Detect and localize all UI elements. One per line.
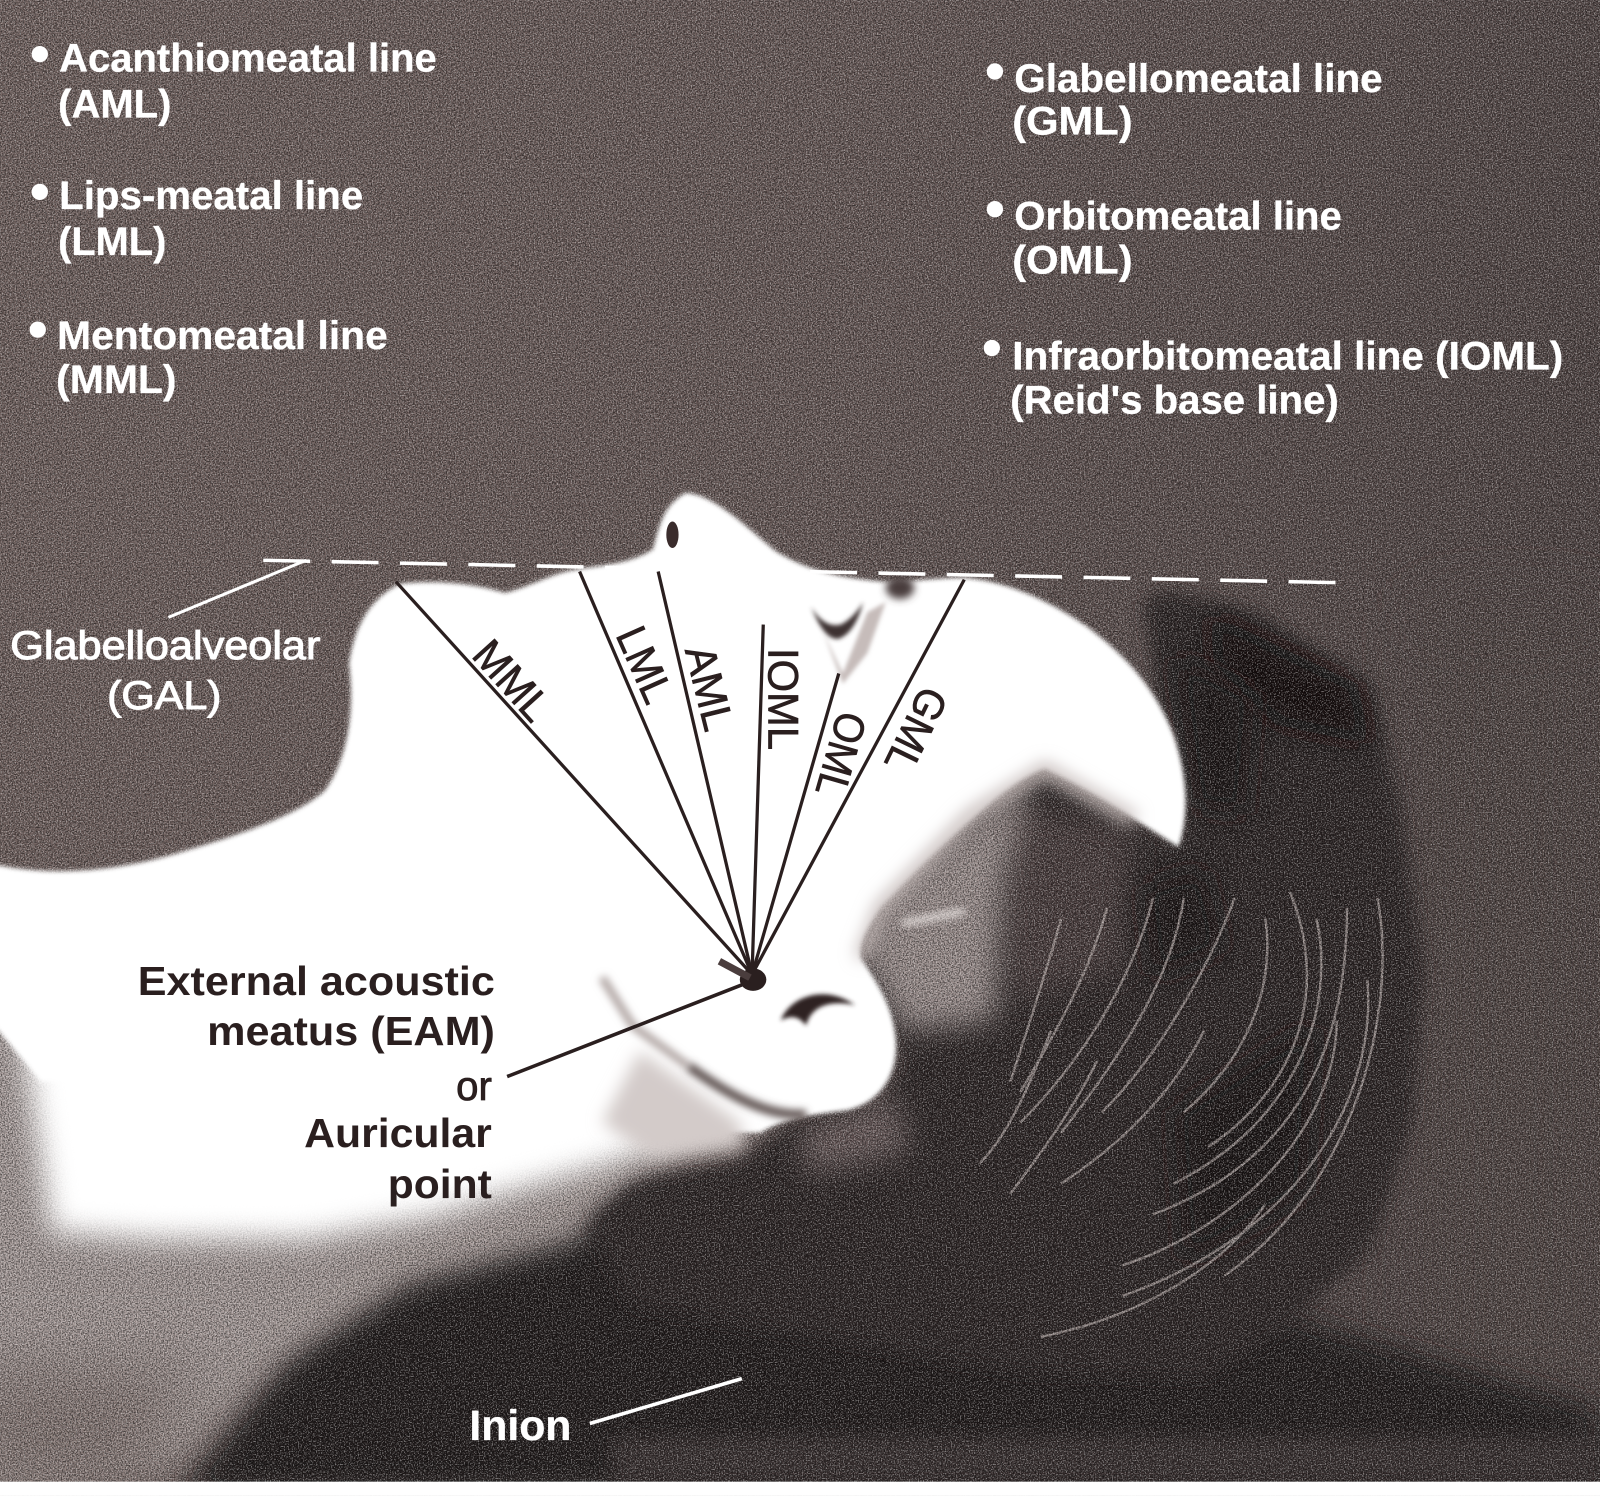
brow shadow bbox=[886, 577, 914, 599]
white face silhouette bbox=[0, 493, 1185, 1133]
dark patch mid hair bbox=[1143, 867, 1224, 980]
mid-tone patch in hair bbox=[996, 806, 1133, 1000]
label: External acoustic meatus or Auricular point bbox=[138, 958, 495, 1207]
legend item: Lips-meatal line: (LML) bbox=[58, 220, 166, 264]
line label: AML: AML bbox=[675, 641, 742, 736]
grey hairline band bbox=[861, 786, 1031, 1031]
eye grey stipple bbox=[822, 602, 886, 684]
legend item: Acanthiomeatal line: Acanthiomeatal line bbox=[59, 36, 437, 80]
hair strands bbox=[980, 892, 1383, 1337]
dashed glabelloalveolar reference line bbox=[263, 560, 1339, 583]
label: Inion: Inion bbox=[469, 1402, 571, 1450]
legend item: Lips-meatal line: Lips-meatal line bbox=[59, 174, 363, 218]
leader line: EAM bbox=[507, 982, 750, 1077]
leader line: Inion bbox=[590, 1379, 742, 1424]
label: External acoustic meatus or Auricular point: External acoustic bbox=[138, 958, 495, 1004]
label: Glabelloalveolar: Glabelloalveolar bbox=[10, 624, 320, 668]
legend item: Mentomeatal line: Mentomeatal line bbox=[57, 314, 388, 358]
line label: IOML: IOML bbox=[758, 648, 806, 750]
label: External acoustic meatus or Auricular point: Auricular bbox=[304, 1110, 492, 1156]
legend item: Mentomeatal line bbox=[30, 314, 388, 402]
legend item: Lips-meatal line bbox=[32, 174, 363, 264]
page margin at the foot bbox=[0, 1482, 1600, 1496]
legend item: Infraorbitomeatal line bbox=[984, 334, 1563, 422]
dark patch beside forehead bbox=[1173, 653, 1255, 816]
bottom band bbox=[612, 1437, 1600, 1484]
legend item: Infraorbitomeatal line: (Reid's base line) bbox=[1010, 378, 1339, 422]
legend item: Glabellomeatal line: (GML) bbox=[1012, 100, 1133, 144]
external acoustic meatus marker bbox=[719, 961, 766, 991]
label: External acoustic meatus or Auricular point: meatus (EAM) bbox=[207, 1008, 495, 1054]
legend item: Orbitomeatal line: (OML) bbox=[1012, 239, 1133, 283]
hair mass bbox=[587, 590, 1424, 1378]
legend item: Glabellomeatal line bbox=[987, 57, 1383, 144]
neck grey fall-off bbox=[0, 1010, 776, 1496]
grey patch below jaw bbox=[602, 1051, 745, 1158]
line label: OML: OML bbox=[806, 706, 875, 802]
legend item: Glabellomeatal line: Glabellomeatal line bbox=[1014, 57, 1383, 101]
shoulder and table shadow bbox=[173, 1174, 1600, 1496]
stippled hairline edge bbox=[861, 769, 1135, 958]
legend item: Infraorbitomeatal line: Infraorbitomeatal line (IOML) bbox=[1012, 334, 1563, 378]
legend item: Orbitomeatal line bbox=[987, 195, 1342, 283]
ear inner fold bbox=[781, 994, 855, 1026]
below-ear band bbox=[800, 1097, 908, 1174]
legend item: Acanthiomeatal line bbox=[32, 36, 437, 126]
legend item: Acanthiomeatal line: (AML) bbox=[58, 82, 171, 126]
label: Glabelloalveolar bbox=[10, 624, 320, 718]
label: External acoustic meatus or Auricular point: point bbox=[388, 1161, 492, 1207]
lower-left darker neck bbox=[0, 1367, 204, 1496]
radiating positioning lines from EAM bbox=[396, 571, 964, 975]
shadow under the ear bbox=[689, 1066, 806, 1115]
line label: MML: MML bbox=[463, 631, 560, 731]
line label: LML: LML bbox=[606, 619, 682, 711]
leader line: Glabelloalveolar bbox=[168, 560, 306, 617]
legend item: Mentomeatal line: (MML) bbox=[56, 358, 177, 402]
jaw fold bbox=[602, 978, 689, 1066]
dark patch lower hair bbox=[1173, 1020, 1316, 1265]
dark rim at top of hair bbox=[1208, 612, 1371, 745]
eye lid bbox=[811, 602, 863, 639]
white lower neck soft shape bbox=[14, 980, 714, 1240]
legend item: Orbitomeatal line: Orbitomeatal line bbox=[1014, 195, 1342, 239]
label: External acoustic meatus or Auricular point: or bbox=[456, 1063, 492, 1109]
light streak in hairline bbox=[902, 911, 964, 924]
right background fall-off bbox=[1429, 612, 1600, 1408]
line label: GML: GML bbox=[875, 679, 957, 780]
label: Glabelloalveolar: (GAL) bbox=[107, 674, 221, 718]
nostril shadow bbox=[666, 521, 679, 548]
